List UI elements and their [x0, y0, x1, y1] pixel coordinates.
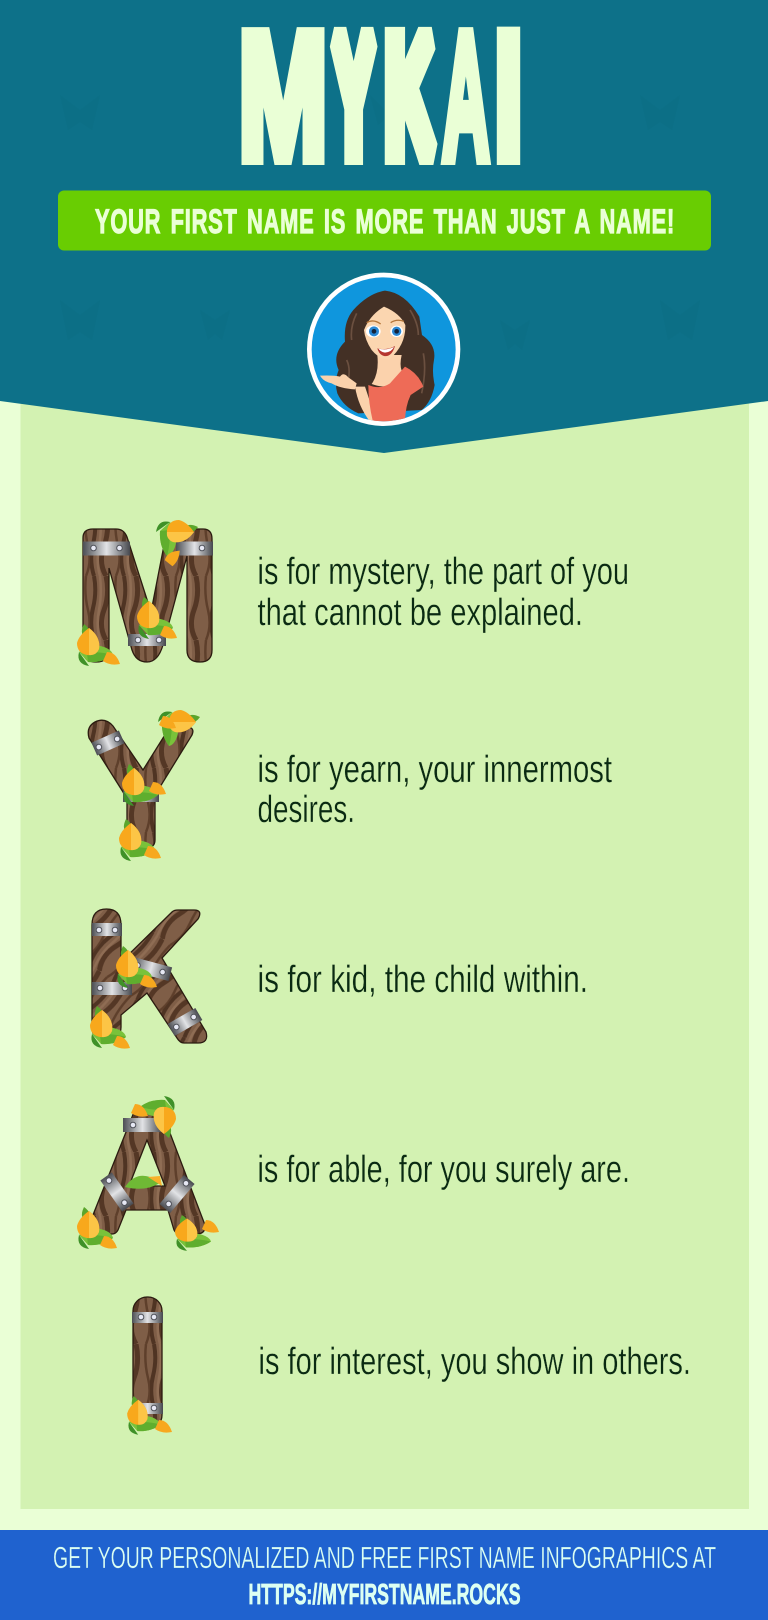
text: Y line: desires. [258, 789, 355, 831]
avatar: woman in circle [307, 273, 460, 426]
text: K line: is for kid, the child within. [258, 959, 588, 1001]
letter I [127, 1297, 172, 1435]
title: Y [333, 4, 374, 187]
letter A row [77, 1096, 630, 1251]
text: Y line [258, 749, 612, 831]
footer band [0, 1530, 768, 1620]
footer url: HTTPS://MYFIRSTNAME.ROCKS [248, 1579, 520, 1611]
title: K [386, 4, 434, 187]
text: M line: is for mystery, the part of you [258, 551, 629, 593]
letter K [90, 909, 207, 1049]
letter A [77, 1096, 219, 1251]
letter Y row [88, 710, 612, 861]
text: M line: that cannot be explained. [258, 592, 583, 634]
text: Y line: is for yearn, your innermost [258, 749, 612, 791]
header band [0, 0, 768, 453]
title [238, 0, 521, 197]
text: A line: is for able, for you surely are. [258, 1149, 630, 1191]
letter M [77, 520, 213, 666]
letter K row [90, 909, 588, 1049]
title: M [238, 0, 328, 197]
letter Y [88, 710, 200, 861]
content panel [20, 380, 749, 1509]
tagline banner [58, 190, 711, 250]
text: M line [258, 551, 629, 634]
letter I row [127, 1297, 691, 1435]
letter M row [77, 520, 629, 666]
title: A [442, 0, 489, 197]
title: I [496, 0, 521, 192]
